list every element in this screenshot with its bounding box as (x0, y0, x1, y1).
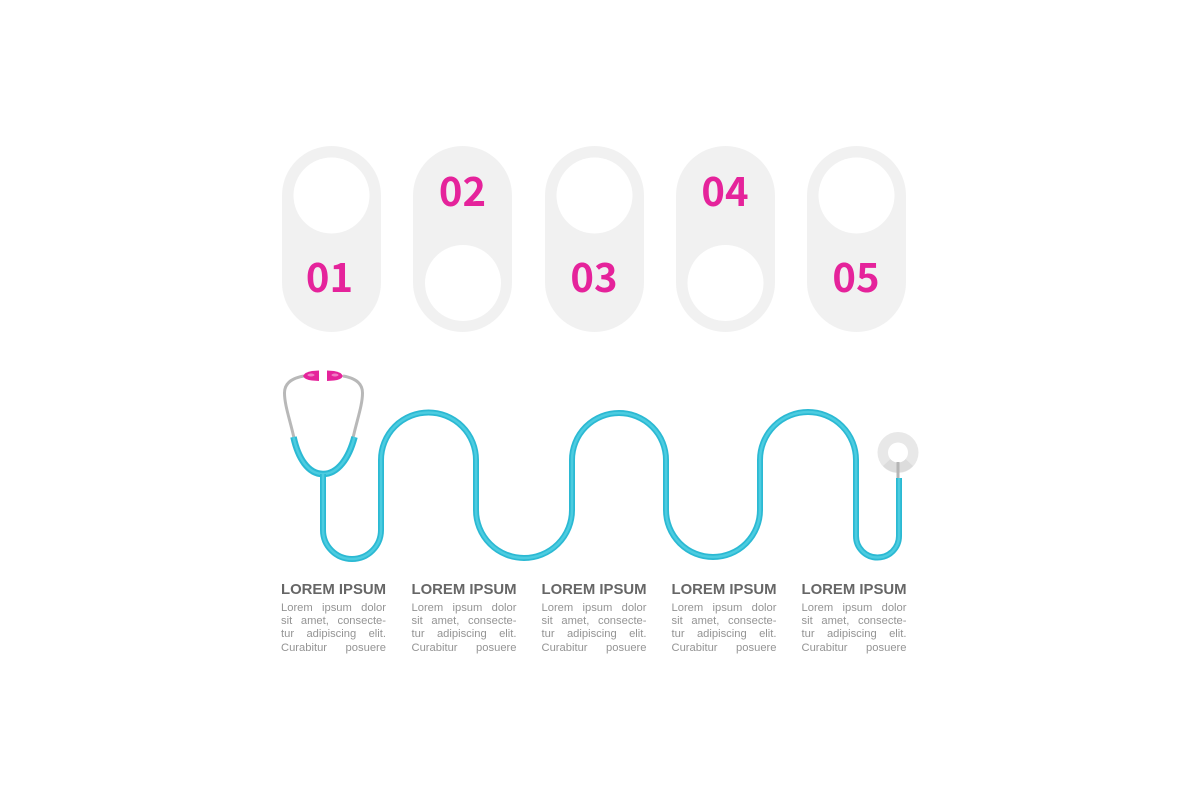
text block 1: sit amet, consecte- (281, 615, 386, 627)
text block 2 (412, 582, 517, 654)
text block 3: Lorem ipsum dolor (542, 602, 646, 614)
text block 2: sit amet, consecte- (412, 615, 516, 627)
text block 1: Curabitur posuere (281, 642, 386, 654)
ear tips (303, 370, 343, 381)
text block 3: LOREM IPSUM (542, 582, 647, 598)
pill 02 (413, 146, 512, 332)
yoke tube (294, 437, 354, 474)
text block 4: tur adipiscing elit. (672, 628, 776, 640)
pill 04 (676, 146, 775, 332)
text block 5: tur adipiscing elit. (802, 628, 906, 640)
text block 3: tur adipiscing elit. (542, 628, 646, 640)
text block 2: Curabitur posuere (412, 642, 516, 654)
chest piece (878, 432, 918, 478)
numbered pills (282, 146, 906, 332)
text block 3 (542, 582, 647, 654)
text block 1: Lorem ipsum dolor (281, 602, 386, 614)
text block 4: Lorem ipsum dolor (672, 602, 776, 614)
text block 2: tur adipiscing elit. (412, 628, 516, 640)
text block 4: Curabitur posuere (672, 642, 776, 654)
text block 3: sit amet, consecte- (542, 615, 646, 627)
text block 3: Curabitur posuere (542, 642, 646, 654)
text block 1: tur adipiscing elit. (281, 628, 386, 640)
pill 05 (807, 146, 906, 332)
text block 4 (672, 582, 777, 654)
text block 4: sit amet, consecte- (672, 615, 776, 627)
text block 2: LOREM IPSUM (412, 582, 517, 598)
pill 01 (282, 146, 381, 332)
text block 5: sit amet, consecte- (802, 615, 906, 627)
pill 03 (545, 146, 644, 332)
text block 5: LOREM IPSUM (802, 582, 907, 598)
pill 01: 01 (306, 246, 353, 304)
main tube (323, 412, 899, 559)
text block 1 (281, 582, 386, 654)
pill 05: 05 (832, 246, 880, 304)
text block 5: Curabitur posuere (802, 642, 906, 654)
text block 5 (802, 582, 907, 654)
pill 03: 03 (570, 246, 618, 304)
pill 04: 04 (701, 160, 749, 218)
ear tubes (284, 376, 362, 438)
text block 4: LOREM IPSUM (672, 582, 777, 598)
text block 1: LOREM IPSUM (281, 582, 386, 598)
text block 2: Lorem ipsum dolor (412, 602, 516, 614)
pill 02: 02 (439, 160, 486, 218)
text block 5: Lorem ipsum dolor (802, 602, 906, 614)
